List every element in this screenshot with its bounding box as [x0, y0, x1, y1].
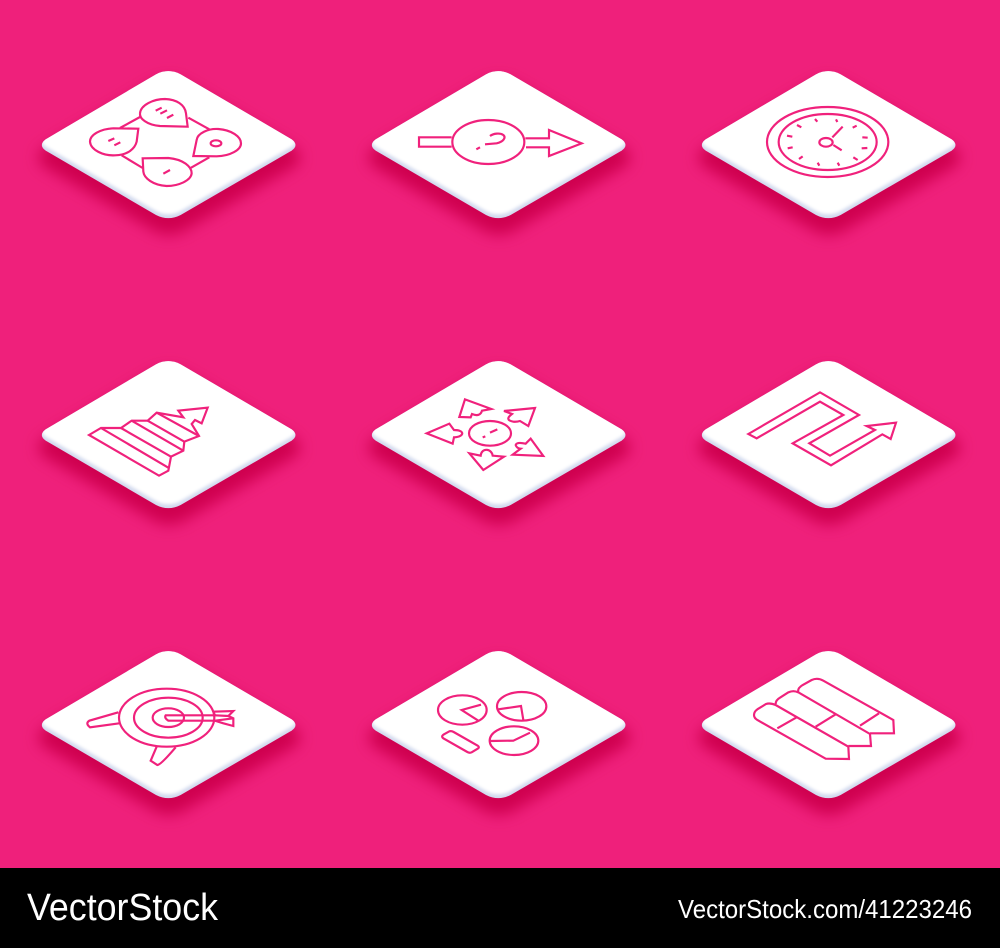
icon: clock	[767, 107, 888, 177]
icon: three pencil-shaped bars	[754, 679, 894, 759]
icon: four connected drops	[90, 99, 241, 186]
tile: target with arrow	[42, 647, 296, 811]
tile: clock	[702, 67, 956, 231]
icon: dartboard target	[87, 689, 233, 765]
icon: stepped arrow	[89, 408, 208, 476]
tile: question mark with arrow	[372, 67, 626, 231]
footer logo text: VectorStock	[27, 887, 219, 929]
tile: stepped pyramid arrow	[42, 357, 296, 521]
tile: winding path arrow	[702, 357, 956, 521]
icon: five arrows around circle	[427, 399, 543, 470]
tile: arrows radiating from circle	[372, 357, 626, 521]
icon: circle with question mark and arrow	[419, 120, 582, 164]
tile: four connected speech drops	[42, 67, 296, 231]
tile: pencil bars	[702, 647, 956, 811]
tile: pie charts	[372, 647, 626, 811]
footer image id text: VectorStock.com/41223246	[678, 894, 972, 924]
icon: zigzag arrow	[748, 392, 896, 465]
footer bar	[0, 868, 1000, 948]
icon: three pie charts and a bar	[438, 692, 546, 755]
